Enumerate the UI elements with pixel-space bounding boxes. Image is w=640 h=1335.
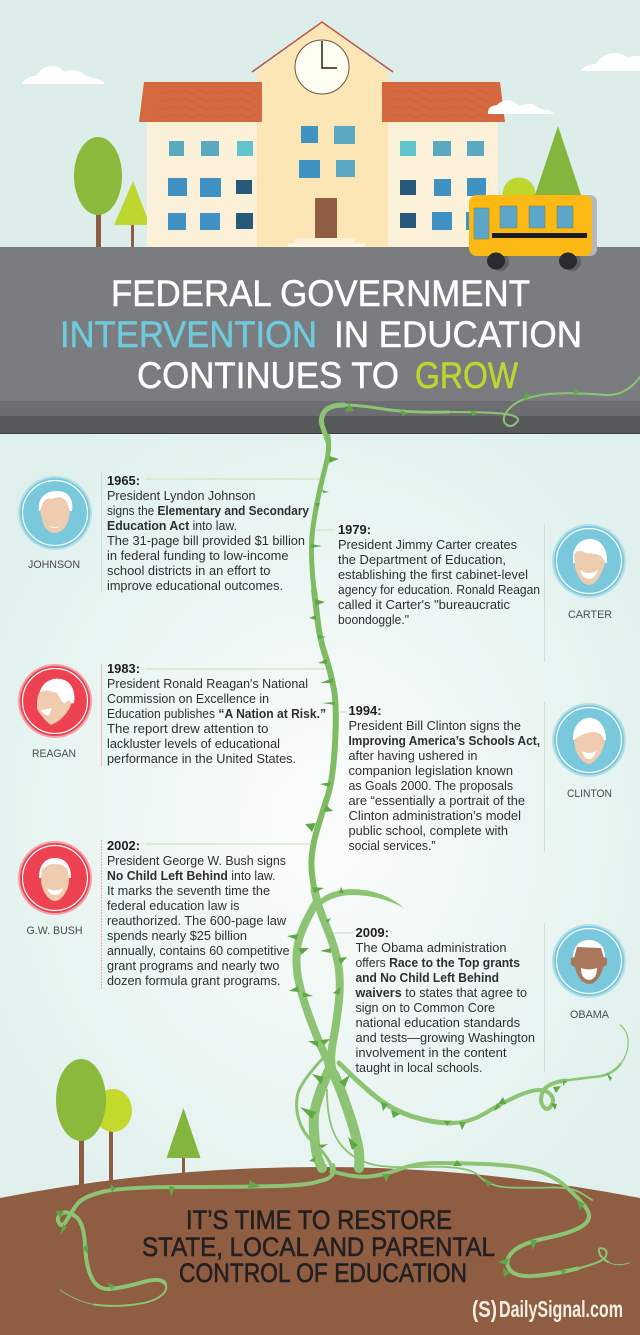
hill bbox=[0, 1167, 640, 1335]
entry 1994: Improving America’s Schools Act, bbox=[348, 733, 540, 748]
right branch bbox=[339, 1063, 451, 1123]
entry 1979: 1979: bbox=[338, 522, 371, 537]
entry 2002 bbox=[107, 838, 290, 988]
entry 2002: President George W. Bush signs bbox=[107, 853, 286, 868]
entry 1979: establishing the first cabinet-level bbox=[338, 567, 528, 582]
left root bbox=[58, 1165, 334, 1289]
portrait: Carter bbox=[552, 524, 626, 598]
entry 2002: 2002: bbox=[107, 838, 140, 853]
entry 2009: and tests—growing Washington bbox=[356, 1030, 535, 1045]
entry 1965: school districts in an effort to bbox=[107, 563, 270, 578]
main title: CONTINUES TO bbox=[137, 355, 399, 396]
entry 1994: public school, complete with bbox=[348, 823, 508, 838]
ground trees bbox=[56, 1059, 200, 1187]
clock bbox=[295, 40, 349, 94]
gable roof line bbox=[252, 22, 393, 72]
entry 2002: dozen formula grant programs. bbox=[107, 973, 280, 988]
main title: IN EDUCATION bbox=[334, 314, 582, 355]
entry 1965 bbox=[107, 473, 310, 593]
logo: DailySignal.com: (S) bbox=[472, 1296, 497, 1322]
sky bbox=[0, 0, 640, 248]
trees beside school bbox=[74, 126, 582, 248]
entry 1979: agency for education. Ronald Reagan bbox=[338, 582, 540, 597]
entry 1979: President Jimmy Carter creates bbox=[338, 537, 517, 552]
entry 1994: as Goals 2000. The proposals bbox=[348, 778, 513, 793]
thin left branch bbox=[297, 1058, 332, 1172]
entry 2009: offers Race to the Top grants bbox=[356, 955, 520, 970]
main title bbox=[60, 273, 582, 396]
crossing branch bbox=[314, 889, 404, 908]
main title: GROW bbox=[415, 355, 518, 396]
entry 1983: 1983: bbox=[107, 661, 140, 676]
door and steps bbox=[288, 198, 365, 248]
right roof bbox=[382, 82, 505, 122]
entry 2009: involvement in the content bbox=[356, 1045, 507, 1060]
portrait: Clinton bbox=[552, 703, 626, 777]
entry 1983: Commission on Excellence in bbox=[107, 691, 269, 706]
school bus bbox=[469, 195, 597, 271]
entry 1994: President Bill Clinton signs the bbox=[348, 718, 521, 733]
portrait: Reagan bbox=[18, 664, 92, 738]
closing message: STATE, LOCAL AND PARENTAL bbox=[142, 1232, 495, 1262]
label: Johnson: JOHNSON bbox=[28, 559, 80, 571]
label: Clinton: CLINTON bbox=[567, 788, 612, 800]
label: Obama: OBAMA bbox=[570, 1009, 610, 1021]
school building bbox=[139, 22, 505, 248]
entry 1994 bbox=[348, 703, 540, 853]
thin middle branch bbox=[327, 1090, 592, 1200]
entry 1994: companion legislation known bbox=[348, 763, 513, 778]
entry 1965: 1965: bbox=[107, 473, 140, 488]
entry 1983 bbox=[107, 661, 326, 766]
entry 1994: social services.” bbox=[348, 838, 436, 853]
cloud over roof bbox=[488, 100, 554, 114]
main title: INTERVENTION bbox=[60, 314, 317, 355]
portrait: Obama bbox=[552, 924, 626, 998]
entry 1979: called it Carter's "bureaucratic bbox=[338, 597, 510, 612]
title band bbox=[0, 247, 640, 434]
background bbox=[0, 434, 640, 1214]
entry 1994: Clinton administration’s model bbox=[348, 808, 521, 823]
entry 1979 bbox=[338, 522, 540, 627]
left wing bbox=[147, 122, 259, 248]
entry 2009: taught in local schools. bbox=[356, 1060, 482, 1075]
label: G.W. Bush: G.W. BUSH bbox=[26, 925, 83, 937]
closing message: IT’S TIME TO RESTORE bbox=[186, 1205, 452, 1235]
main trunk bbox=[311, 436, 329, 590]
center block bbox=[257, 22, 388, 248]
entry 2009: and No Child Left Behind bbox=[356, 970, 499, 985]
entry 2002: No Child Left Behind into law. bbox=[107, 868, 276, 883]
entry 2009 bbox=[355, 925, 535, 1075]
entry 1965: signs the Elementary and Secondary bbox=[107, 503, 310, 518]
entry 1965: President Lyndon Johnson bbox=[107, 488, 256, 503]
second strand bbox=[296, 903, 329, 1070]
entry 1965: The 31-page bill provided $1 billion bbox=[107, 533, 305, 548]
entry 1979: the Department of Education, bbox=[338, 552, 506, 567]
entry 2002: annually, contains 60 competitive bbox=[107, 943, 290, 958]
entry 2002: federal education law is bbox=[107, 898, 240, 913]
entry 1979: boondoggle." bbox=[338, 612, 409, 627]
portrait: G.W. Bush bbox=[18, 841, 92, 915]
label: Reagan: REAGAN bbox=[32, 748, 76, 760]
portrait: Johnson bbox=[18, 476, 92, 550]
entry 2002: It marks the seventh time the bbox=[107, 883, 270, 898]
entry 2002: reauthorized. The 600-page law bbox=[107, 913, 287, 928]
entry 2009: sign on to Common Core bbox=[356, 1000, 495, 1015]
entry 2002: spends nearly $25 billion bbox=[107, 928, 247, 943]
beanstalk vine bbox=[55, 377, 640, 1306]
main title: FEDERAL GOVERNMENT bbox=[111, 273, 530, 314]
closing message: CONTROL OF EDUCATION bbox=[179, 1258, 467, 1288]
right wing bbox=[386, 122, 498, 248]
entry 2009: The Obama administration bbox=[356, 940, 506, 955]
closing message bbox=[142, 1205, 495, 1288]
entry 2009: waivers to states that agree to bbox=[355, 985, 527, 1000]
label: Carter: CARTER bbox=[568, 609, 612, 621]
entry 1983: President Ronald Reagan's National bbox=[107, 676, 308, 691]
entry 2009: national education standards bbox=[356, 1015, 520, 1030]
entry 2009: 2009: bbox=[356, 925, 389, 940]
vertical rules bbox=[102, 473, 544, 1072]
entry 1983: lackluster levels of educational bbox=[107, 736, 280, 751]
entry 1965: improve educational outcomes. bbox=[107, 578, 283, 593]
thorns bbox=[55, 388, 612, 1290]
entry 1965: in federal funding to low-income bbox=[107, 548, 288, 563]
tail in title band bbox=[449, 377, 640, 426]
entry 1983: The report drew attention to bbox=[107, 721, 268, 736]
left roof bbox=[139, 82, 262, 122]
entry 2002: grant programs and nearly two bbox=[107, 958, 280, 973]
connector rules bbox=[145, 479, 352, 933]
entry 1965: Education Act into law. bbox=[107, 518, 237, 533]
entry 1994: after having ushered in bbox=[348, 748, 478, 763]
entry 1983: Education publishes “A Nation at Risk.” bbox=[107, 706, 326, 721]
entry 1994: 1994: bbox=[348, 703, 382, 718]
right root bbox=[335, 1163, 589, 1276]
clouds bbox=[22, 53, 640, 84]
entry 1983: performance in the United States. bbox=[107, 751, 296, 766]
windows bbox=[168, 126, 486, 230]
entry 1994: are “essentially a portrait of the bbox=[348, 793, 525, 808]
